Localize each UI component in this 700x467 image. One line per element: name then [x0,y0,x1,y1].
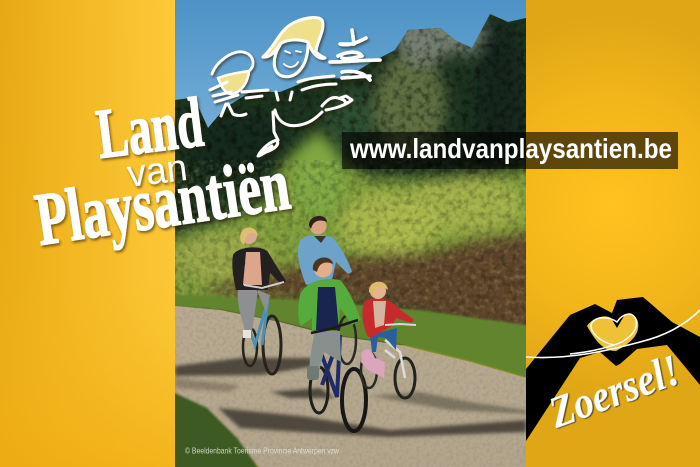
logo: cartoon doodle figures [210,18,380,156]
shoe [258,140,278,156]
cyclist: man [298,216,356,364]
panel: left yellow band [0,0,176,467]
heart opening [587,314,638,351]
white heart line [570,314,636,354]
arm lines [298,76,352,110]
title word: van: van [125,147,190,196]
torso and legs [273,92,322,140]
cyclist: girl [361,282,416,398]
title word: Land: Land [92,84,207,174]
website banner [342,132,678,169]
bottom-left grass [175,392,260,467]
gravel path [175,306,526,467]
banner background [342,132,678,169]
small figure bowl [218,71,249,94]
copyright credit: © Beeldenbank Toerisme Provincie Antwerpen vzw [185,446,340,456]
hands silhouette [526,297,700,441]
face [274,44,308,77]
small figure body strokes [210,82,268,116]
brown hedge [198,225,526,326]
grass verge [170,294,532,380]
icon: heart made by hands [526,297,700,441]
text: Zoersel!: Zoersel! [542,345,686,438]
sky [175,0,526,128]
forest base [175,14,526,345]
bush and hedge texture [175,160,526,345]
eyes and smile [284,51,301,67]
cyclist: boy [298,257,366,431]
tree shadows on path [175,358,526,437]
music-like strokes right [330,30,380,80]
forest canopy texture [175,0,526,230]
green bushes [165,130,540,310]
title: Land van Playsantiën [30,84,295,262]
small figure head [212,52,253,74]
panel: right yellow band [526,0,700,467]
photo: family cycling in the forest [165,0,540,467]
cyclist: woman [232,227,286,374]
gravel speckle [175,300,526,467]
white sweeping line [526,310,700,358]
hair of large figure [263,18,325,58]
title word: Playsantiën: Playsantiën [30,142,295,262]
